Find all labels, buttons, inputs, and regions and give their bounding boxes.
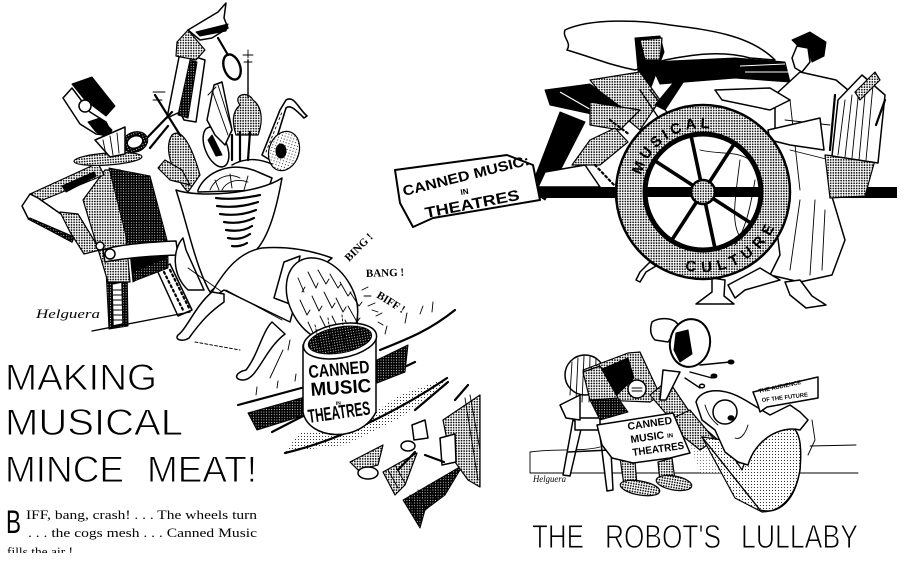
cartoon: robot attacking the wheel of musical culture [394,20,897,309]
speech banner: the audience of the future: OF THE FUTURE [762,392,808,404]
robot torso [83,168,168,282]
can: canned music in theatres: MUSIC [310,375,372,401]
robot with bonnet [583,316,718,450]
lyre [825,72,885,198]
banner: canned music in theatres: THEATRES [424,187,521,222]
intro text block [7,510,257,553]
intro text block: B [6,504,21,540]
mincer drum with spray [272,245,383,355]
speech banner: the audience of the future [753,377,818,412]
sound words: BANG ! [366,267,404,280]
cradle [696,391,815,512]
banner: canned music in theatres [395,152,540,227]
headline: making musical mince meat: MUSICAL [5,402,183,443]
chair [560,355,613,491]
robot legs and feet [619,458,693,498]
banner: canned music in theatres: CANNED MUSIC: [401,152,531,199]
balcony and frieze [238,302,455,453]
apron [597,413,690,463]
robot legs [106,262,192,329]
black axle bar [537,187,897,198]
caption: the robot's lullaby: THE [532,518,584,555]
can: canned music in theatres [301,315,379,435]
can: canned music in theatres: CANNED [308,358,371,383]
apron: MUSIC IN [630,428,674,446]
caption: the robot's lullaby: ROBOT'S [605,518,721,555]
caption: the robot's lullaby: LULLABY [741,518,858,555]
sound words: BING ! [343,231,376,264]
headline: making musical mince meat: MAKING [5,357,157,398]
woman's dress [636,72,848,308]
robot left arm [22,163,104,254]
signature: Helguera [532,474,566,484]
wheel of musical culture: MUSICAL [632,118,710,174]
caption: the robot's lullaby [532,518,858,555]
intro text block: . . . the cogs mesh . . . Canned Music [28,525,257,540]
cartoon: robot feeding instruments into a mincer [22,3,480,528]
can: canned music in theatres: IN [336,401,342,407]
robot head [63,77,125,157]
wheel of musical culture: CULTURE [686,224,774,272]
apron: CANNED [627,415,673,433]
flag [564,21,775,70]
robot raised arm [145,3,228,148]
banner: canned music in theatres: IN [460,187,469,197]
instruments [153,38,307,192]
rug shading [690,445,760,473]
can: canned music in theatres: THEATRES [307,398,372,428]
headline: making musical mince meat [5,357,257,490]
signature: Helguera [35,306,101,321]
headline: making musical mince meat: MEAT! [147,449,257,490]
sound words [343,231,407,316]
floor band [530,445,858,473]
cartoon: the robot's lullaby [530,316,858,512]
intro text block: fills the air ! [7,544,73,559]
wheel of musical culture [615,104,792,280]
audience seats [350,382,480,528]
robot on the wheel [530,36,790,200]
speech banner: the audience of the future: THE AUDIENCE [758,380,802,395]
sound words: BIFF ! [374,289,407,316]
mincer funnel [176,178,282,292]
mincer body and crank [103,238,332,380]
musical notes [685,360,734,388]
apron: THEATRES [632,440,685,459]
woman's head [792,32,826,72]
ground line [92,312,190,331]
headline: making musical mince meat: MINCE [5,449,124,490]
robot collar [74,128,151,167]
intro text block: IFF, bang, crash! . . . The wheels turn [26,507,258,522]
